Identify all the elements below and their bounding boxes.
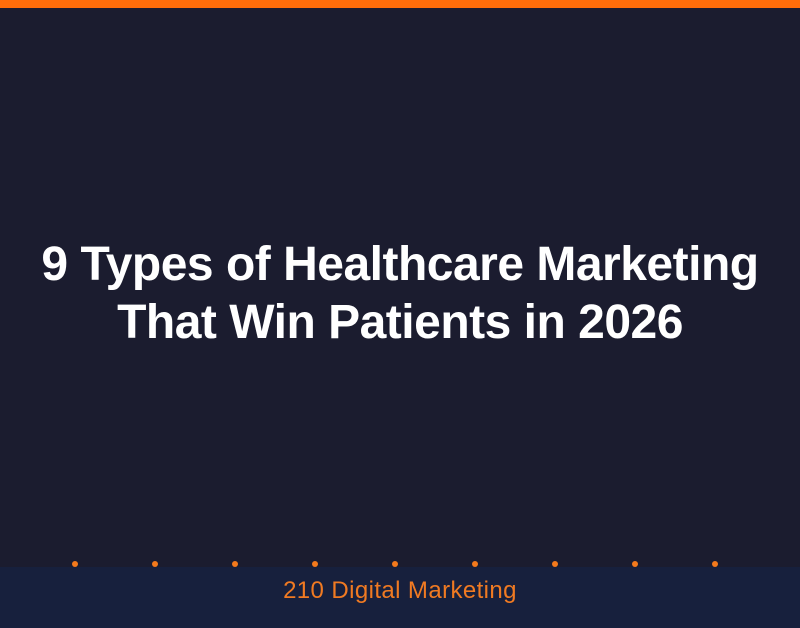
title: [41, 238, 759, 349]
top accent bar: [0, 0, 800, 8]
dot row: [72, 561, 718, 567]
footer band: [0, 567, 800, 628]
title: 9 Types of Healthcare Marketing: [41, 238, 759, 291]
title: That Win Patients in 2026: [117, 296, 683, 349]
footer band: 210 Digital Marketing: [283, 577, 517, 604]
